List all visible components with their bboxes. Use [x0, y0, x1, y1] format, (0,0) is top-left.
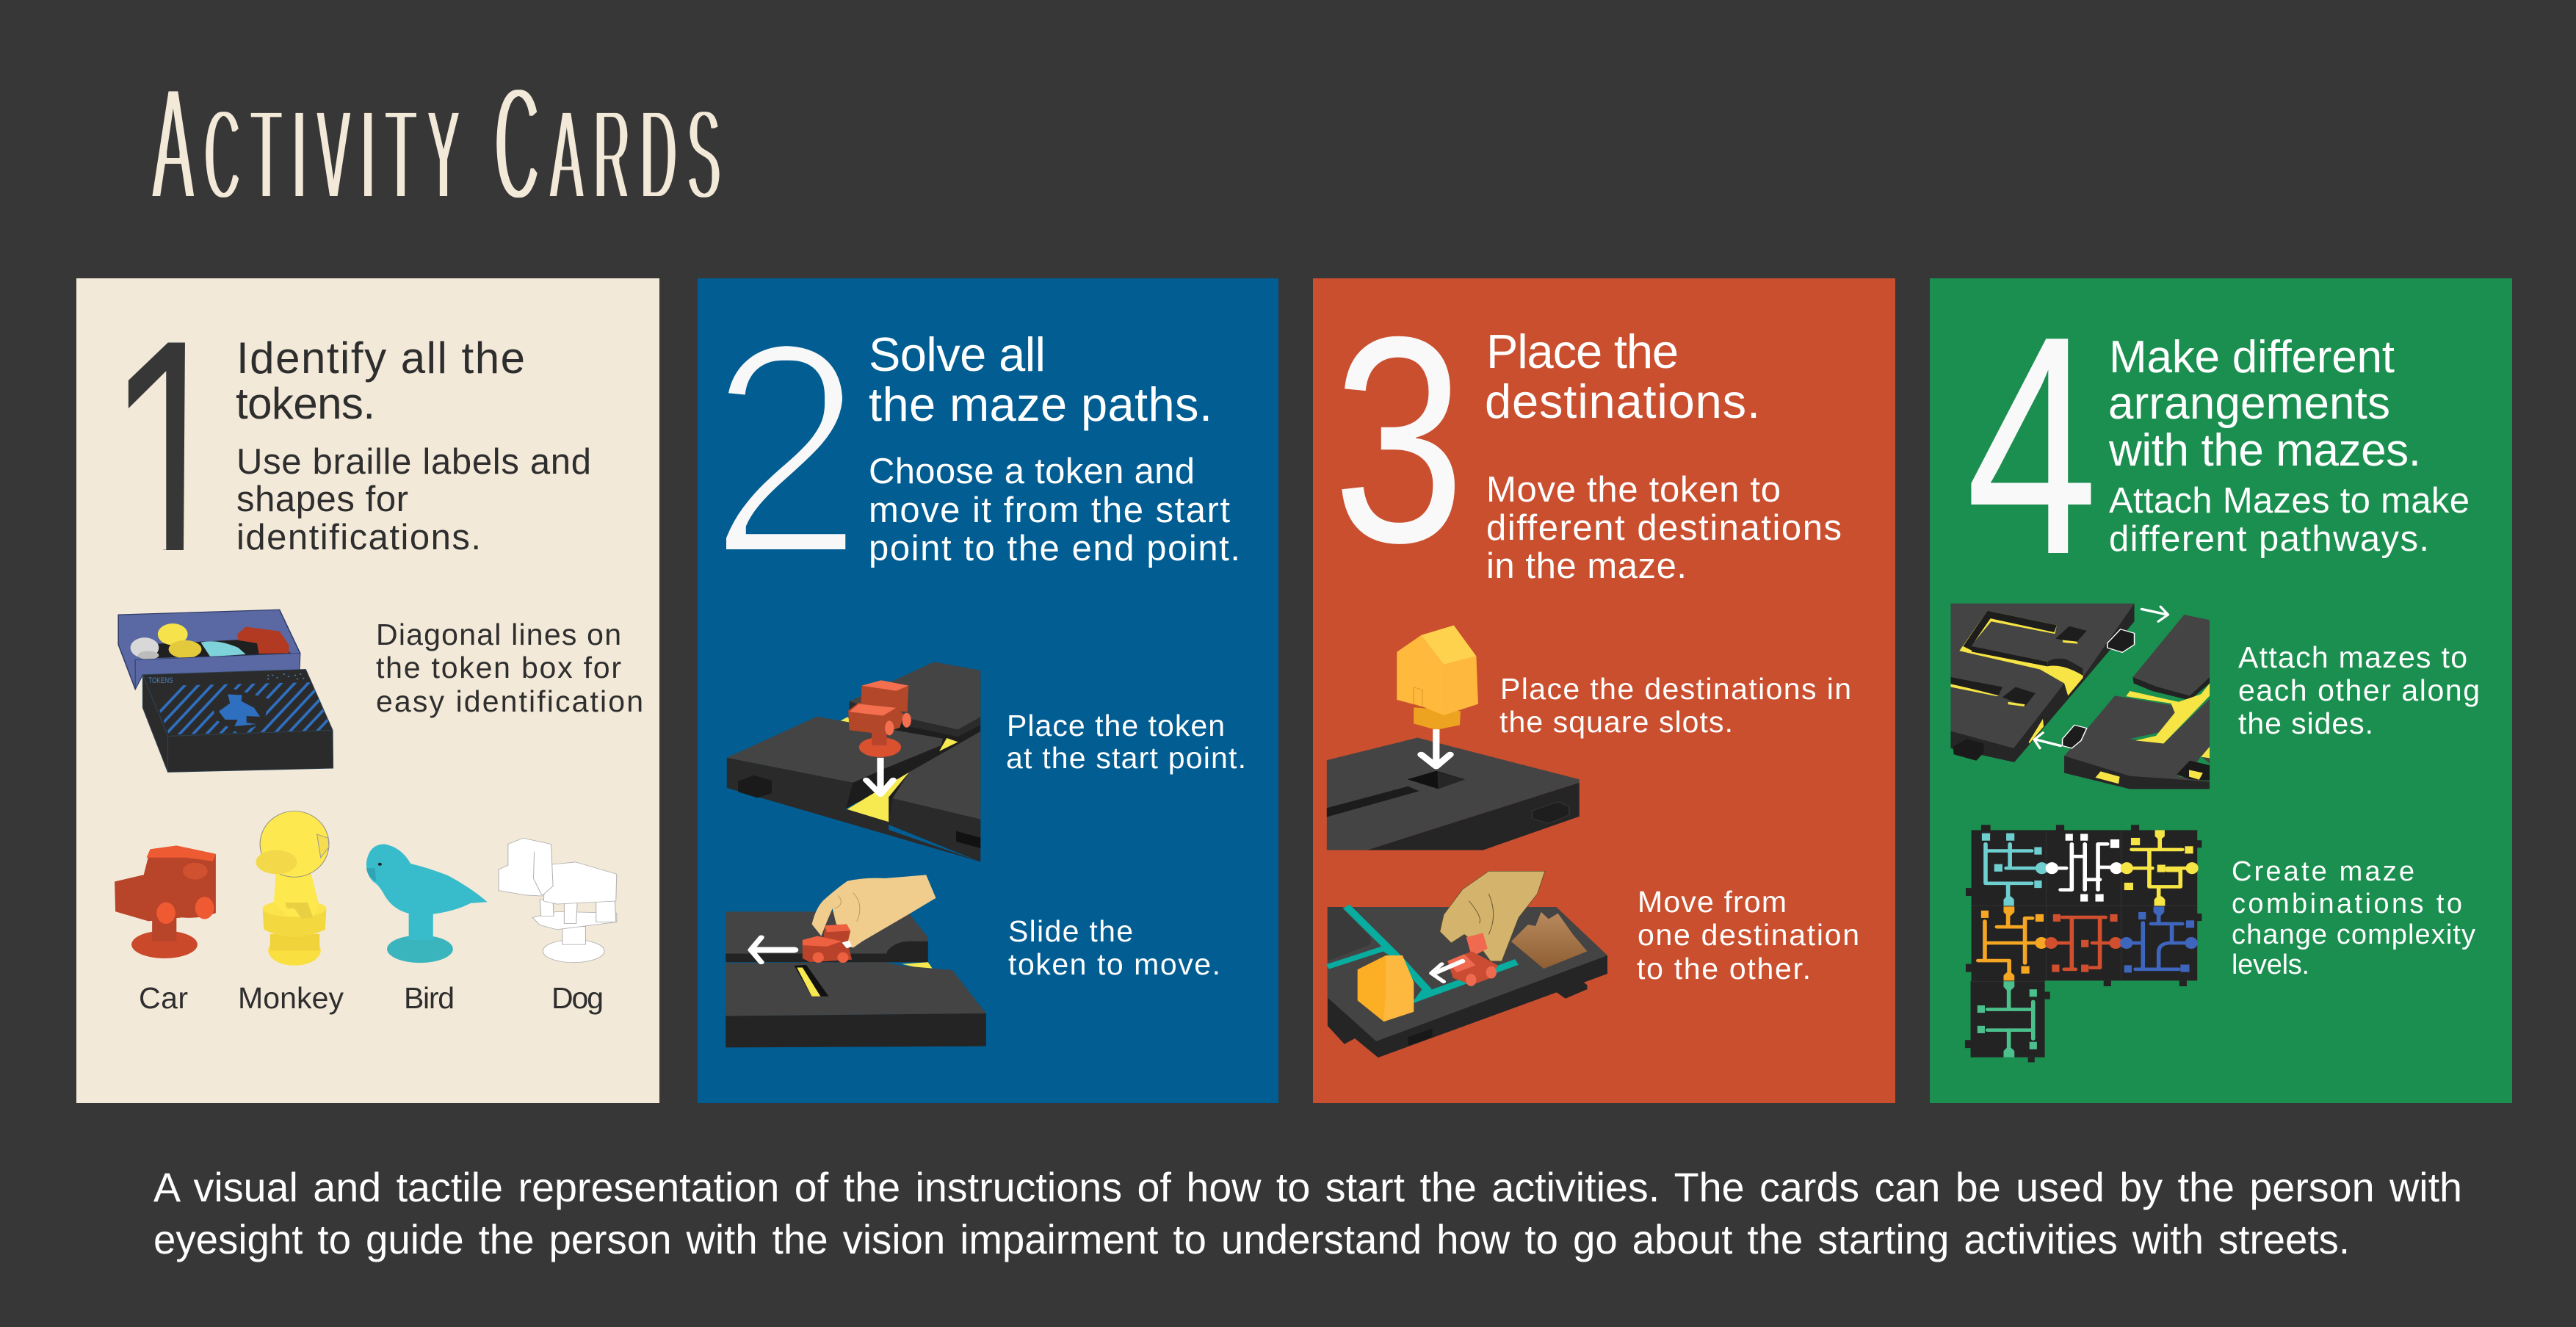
- icon: car token: [115, 845, 216, 958]
- caption: place the token: [1006, 709, 1246, 775]
- card 2 instructions: point to the end point.: [869, 529, 1240, 568]
- box caption: the token box for: [376, 651, 621, 684]
- token labels: Dog: [551, 981, 604, 1015]
- card 1 instructions: Use braille labels and: [236, 442, 591, 482]
- numeral 1: 1: [105, 269, 240, 647]
- card 3 heading: destinations.: [1485, 375, 1760, 428]
- card 3 instructions: Move the token to: [1486, 470, 1781, 510]
- bottom description text: A visual and tactile representation of the instructions of how to start the activities. The cards can be used by the person with: [153, 1164, 2462, 1210]
- card 4 background: [1930, 278, 2512, 1103]
- card 4 instructions: different pathways.: [2109, 519, 2429, 559]
- caption: slide the token: token to move.: [1008, 947, 1220, 981]
- bottom description text: [153, 1164, 2462, 1262]
- caption: attach mazes: the sides.: [2238, 706, 2373, 740]
- token labels: [139, 981, 604, 1015]
- icon: bird token: [366, 844, 488, 963]
- card 2 instructions: [869, 452, 1240, 568]
- icon: token box: [117, 610, 333, 773]
- card 3 background: [1313, 278, 1895, 1103]
- token labels: Bird: [404, 981, 455, 1015]
- card 2 heading: Solve all: [869, 328, 1046, 381]
- icon: monkey token: [256, 811, 329, 966]
- card 3 instructions: in the maze.: [1486, 546, 1687, 586]
- card 4 heading: arrangements: [2108, 378, 2390, 429]
- caption: attach mazes: [2238, 640, 2480, 740]
- caption: place destinations: Place the destinations in: [1500, 672, 1851, 706]
- title: ACTIVITY CARDS: [153, 54, 731, 234]
- card 3 instructions: [1486, 470, 1842, 586]
- illustration: attach mazes together: [1951, 604, 2210, 789]
- token labels: Car: [139, 981, 188, 1015]
- panel: card 3 place the destinations: [1313, 275, 1895, 1103]
- panel: card 1 identify tokens: [76, 269, 659, 1103]
- card 4 heading: Make different: [2109, 332, 2395, 383]
- card 3 heading: Place the: [1486, 325, 1679, 378]
- icon: token box: TOKENS: [148, 676, 173, 685]
- card 2 background: [698, 278, 1278, 1103]
- box caption: [376, 618, 643, 718]
- illustration: slide the token: [726, 875, 986, 1047]
- caption: place the token: Place the token: [1007, 709, 1225, 742]
- card 1 background: [76, 278, 659, 1103]
- caption: move between destinations: one destination: [1638, 918, 1859, 952]
- card 4 heading: with the mazes.: [2108, 425, 2421, 476]
- card 4 heading: [2108, 332, 2421, 476]
- card 4 instructions: Attach Mazes to make: [2109, 481, 2470, 521]
- caption: maze combinations: Create maze: [2232, 856, 2414, 887]
- card 2 heading: the maze paths.: [869, 377, 1212, 431]
- numeral 2: 2: [709, 280, 863, 617]
- caption: maze combinations: change complexity: [2232, 919, 2475, 950]
- caption: place the token: at the start point.: [1006, 741, 1246, 775]
- card 1 heading: tokens.: [236, 379, 375, 428]
- card 2 heading: [869, 328, 1212, 431]
- illustration: move between destinations: [1328, 871, 1607, 1057]
- panel: card 2 solve the maze: [698, 278, 1278, 1103]
- card 3 instructions: different destinations: [1486, 508, 1842, 548]
- caption: move between destinations: Move from: [1638, 885, 1787, 919]
- card 1 heading: Identify all the: [236, 333, 525, 383]
- card 1 instructions: shapes for: [236, 480, 408, 519]
- panel: card 4 make arrangements: [1930, 272, 2512, 1103]
- caption: slide the token: Slide the: [1008, 914, 1133, 948]
- card 4 instructions: [2109, 481, 2470, 559]
- numeral 3: 3: [1333, 275, 1465, 604]
- caption: attach mazes: Attach mazes to: [2238, 640, 2467, 674]
- card 1 instructions: [236, 442, 591, 557]
- card 1 heading: [236, 333, 525, 428]
- bottom description text: eyesight to guide the person with the vision impairment to understand how to go about the starting activities with streets.: [153, 1216, 2350, 1262]
- caption: place destinations: [1499, 672, 1851, 739]
- box caption: Diagonal lines on: [376, 618, 621, 651]
- numeral 4: 4: [1966, 272, 2098, 619]
- caption: maze combinations: levels.: [2232, 950, 2309, 980]
- caption: attach mazes: each other along: [2238, 673, 2480, 707]
- caption: move between destinations: to the other.: [1637, 952, 1811, 986]
- card 2 instructions: Choose a token and: [869, 452, 1195, 491]
- illustration: combined maze layout: [1965, 825, 2201, 1063]
- box caption: easy identification: [376, 684, 643, 718]
- token labels: Monkey: [238, 981, 344, 1015]
- card 2 instructions: move it from the start: [869, 491, 1230, 530]
- caption: maze combinations: [2232, 856, 2475, 980]
- caption: move between destinations: [1637, 885, 1859, 986]
- card 3 heading: [1485, 325, 1760, 428]
- caption: maze combinations: combinations to: [2232, 889, 2462, 919]
- illustration: place destination house: [1327, 625, 1580, 850]
- illustration: place the token on the maze: [727, 662, 980, 862]
- card 1 instructions: identifications.: [236, 518, 481, 557]
- caption: slide the token: [1008, 914, 1220, 981]
- icon: dog token: [499, 838, 617, 963]
- caption: place destinations: the square slots.: [1499, 705, 1733, 739]
